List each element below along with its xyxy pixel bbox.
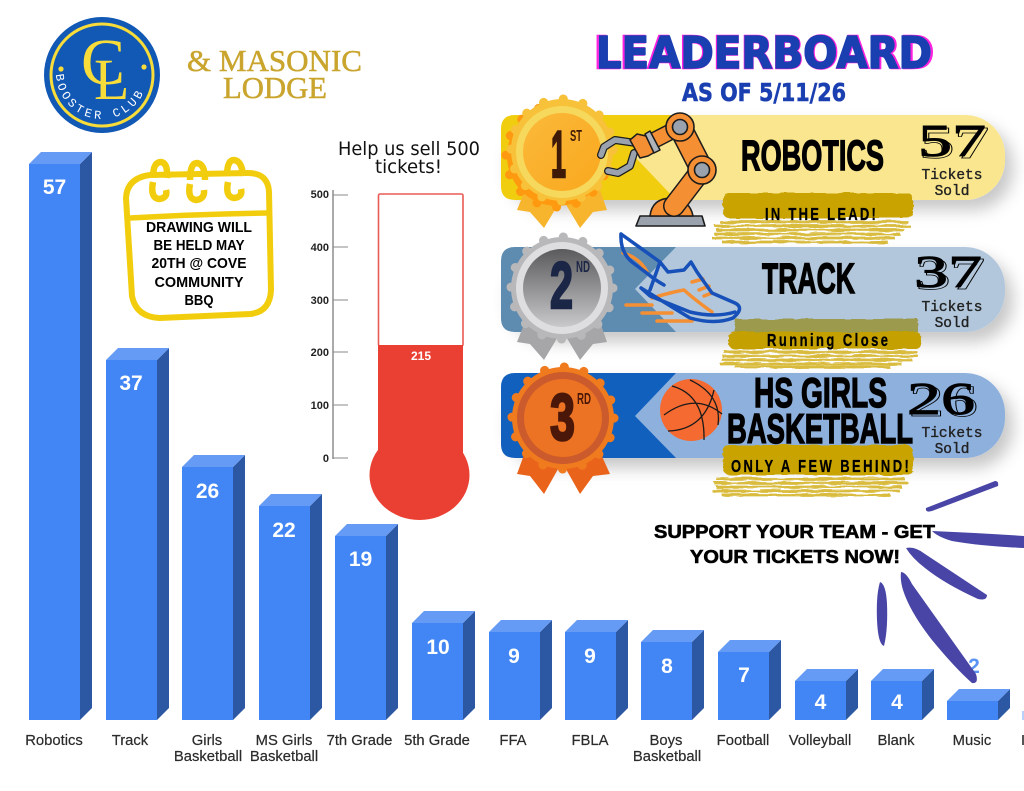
bar: Girls Basketball 26 <box>174 455 245 765</box>
brush: in the lead: IN THE LEAD! <box>765 205 876 225</box>
bar: 5th Grade 10 <box>404 611 475 749</box>
icon: blue burst rays <box>877 481 1024 683</box>
panel: 3rd place HS Girls Basketball <box>501 367 1005 495</box>
label: Track: TRACK <box>762 255 855 303</box>
icon: basketball <box>660 379 722 441</box>
logo: CL booster club: L <box>94 47 129 112</box>
bar: FBLA 9 <box>565 620 628 749</box>
caption: tickets sold <box>922 426 982 458</box>
count: 57: 57 <box>920 117 989 168</box>
label: HS Girls Basketball: BASKETBALL <box>727 405 913 452</box>
medal: third: 3 <box>550 380 575 454</box>
bar: Blank 4: Blank <box>877 733 915 749</box>
bar: Football 7 <box>717 640 781 749</box>
bar: Music 2: Music <box>953 733 992 749</box>
bar: Music 2 <box>947 655 1010 749</box>
text: drawing date: COMMUNITY <box>154 274 244 291</box>
axis with ticks <box>333 190 348 459</box>
bar: 7th Grade 19: 7th Grade <box>327 733 392 749</box>
brush: in the lead <box>712 193 913 242</box>
heading: and Masonic Lodge <box>187 43 362 105</box>
caption: tickets sold: Tickets <box>922 168 982 184</box>
count: 26: 26 <box>909 375 978 426</box>
medal: third <box>512 367 614 494</box>
medal: first: ST <box>570 128 582 145</box>
caption: tickets sold <box>922 300 982 332</box>
axis labels <box>311 189 329 465</box>
medal: first <box>506 99 613 228</box>
medal: second: ND <box>576 259 590 276</box>
caption: tickets sold: Sold <box>935 316 969 332</box>
bar: Volleyball 4: Volleyball <box>789 733 851 749</box>
bar: Football 7: 7 <box>738 664 750 687</box>
bar: clipped next bar <box>1022 711 1024 745</box>
brush: running close: Running Close <box>767 331 888 351</box>
bar: 7th Grade 19: 19 <box>349 548 372 571</box>
bar: Blank 4 <box>871 669 934 749</box>
bar: Music 2: 2 <box>968 655 980 678</box>
logo: CL booster club: BOOSTER CLUB <box>56 74 142 119</box>
bar: FBLA 9: FBLA <box>571 733 609 749</box>
bar: Robotics 57 <box>25 152 92 749</box>
icon: calendar note <box>126 160 271 318</box>
heading: and Masonic Lodge: & MASONIC <box>187 43 362 78</box>
bar: Track 37: 37 <box>119 372 143 395</box>
count: 57 <box>918 115 989 168</box>
thermometer chart: 215 of 500: 215 <box>411 349 431 363</box>
bar chart: tickets sold per team <box>25 152 1024 765</box>
icon: winged shoe <box>621 234 740 322</box>
text: drawing date: BE HELD MAY <box>154 237 244 254</box>
bar: Boys Basketball 8: 8 <box>661 655 673 678</box>
axis labels: 300 <box>311 295 329 307</box>
count: 37 <box>914 246 985 299</box>
heading: goal: Help us sell 500 <box>338 138 480 160</box>
count: 26 <box>907 373 978 426</box>
bar: Track 37 <box>106 348 169 749</box>
bar: Girls Basketball 26: Basketball <box>174 749 242 765</box>
bar: 5th Grade 10: 10 <box>426 636 450 659</box>
axis labels: 100 <box>311 400 329 412</box>
bar: Volleyball 4 <box>789 669 858 749</box>
icon: robot arm <box>601 113 716 226</box>
axis labels: 500 <box>311 189 329 201</box>
axis labels: 200 <box>311 347 329 359</box>
bar: Football 7: Football <box>717 733 769 749</box>
brush: running close <box>720 319 921 367</box>
bar: Girls Basketball 26: 26 <box>196 480 219 503</box>
medal: second: 2 <box>550 248 573 322</box>
panel: 1st place Robotics <box>501 99 1005 242</box>
subtitle: date: AS OF 5/11/26 <box>682 78 846 107</box>
count: 57: 57 <box>918 115 986 166</box>
caption: tickets sold: Tickets <box>922 426 982 442</box>
medal: first: 1 <box>551 117 566 191</box>
bar: FFA 9: FFA <box>499 733 527 749</box>
callout: support your team <box>654 522 935 567</box>
bar: Robotics 57: Robotics <box>25 733 83 749</box>
bar: Boys Basketball 8 <box>633 630 704 765</box>
label: HS Girls Basketball: HS GIRLS <box>754 369 887 416</box>
bar: MS Girls Basketball 22: MS Girls <box>256 733 312 749</box>
bar: MS Girls Basketball 22: 22 <box>272 519 296 542</box>
callout: support your team: YOUR TICKETS NOW! <box>690 547 900 567</box>
heading: goal: tickets! <box>375 156 442 178</box>
bar: 7th Grade 19 <box>327 524 398 749</box>
callout: support your team: SUPPORT YOUR TEAM - GET <box>654 522 935 542</box>
caption: tickets sold: Tickets <box>922 300 982 316</box>
title: leaderboard: LEADERBOARD <box>594 28 934 79</box>
count: 37: 37 <box>916 248 985 299</box>
text: drawing date: 20TH @ COVE <box>152 255 246 272</box>
bar: Girls Basketball 26: Girls <box>192 733 222 749</box>
thermometer chart: 215 of 500 <box>311 189 470 520</box>
count: 26: 26 <box>907 373 975 424</box>
bar: MS Girls Basketball 22 <box>250 494 322 765</box>
count: 37: 37 <box>914 246 982 297</box>
text: drawing date <box>146 219 252 309</box>
text: drawing date: DRAWING WILL <box>146 219 252 236</box>
bar: FFA 9 <box>489 620 552 749</box>
medal: third: RD <box>577 391 591 408</box>
title: leaderboard: LEADERBOARD <box>596 28 932 79</box>
bar: Robotics 57: 57 <box>43 176 66 199</box>
brush: only a few behind <box>712 445 913 495</box>
caption: tickets sold <box>922 168 982 200</box>
label: Robotics: ROBOTICS <box>741 132 884 180</box>
axis labels: 0 <box>323 453 329 465</box>
bar: Volleyball 4: 4 <box>815 691 827 714</box>
heading: goal <box>338 138 480 178</box>
label: HS Girls Basketball <box>727 369 913 452</box>
logo: CL booster club: C <box>81 26 125 99</box>
bar: Blank 4: 4 <box>891 691 903 714</box>
brush: only a few behind: ONLY A FEW BEHIND! <box>731 457 909 477</box>
bar: FFA 9: 9 <box>508 645 520 668</box>
bar: Track 37: Track <box>112 733 149 749</box>
medal: second <box>511 237 613 360</box>
caption: tickets sold: Sold <box>935 442 969 458</box>
bar: Boys Basketball 8: Basketball <box>633 749 701 765</box>
bar: MS Girls Basketball 22: Basketball <box>250 749 318 765</box>
logo: CL booster club <box>44 17 160 133</box>
panel: 2nd place Track <box>501 234 1005 367</box>
bar: Boys Basketball 8: Boys <box>650 733 682 749</box>
bar: 5th Grade 10: 5th Grade <box>404 733 470 749</box>
text: drawing date: BBQ <box>184 292 214 309</box>
axis labels: 400 <box>311 242 329 254</box>
caption: tickets sold: Sold <box>935 184 969 200</box>
heading: and Masonic Lodge: LODGE <box>223 70 327 105</box>
bar: FBLA 9: 9 <box>584 645 596 668</box>
